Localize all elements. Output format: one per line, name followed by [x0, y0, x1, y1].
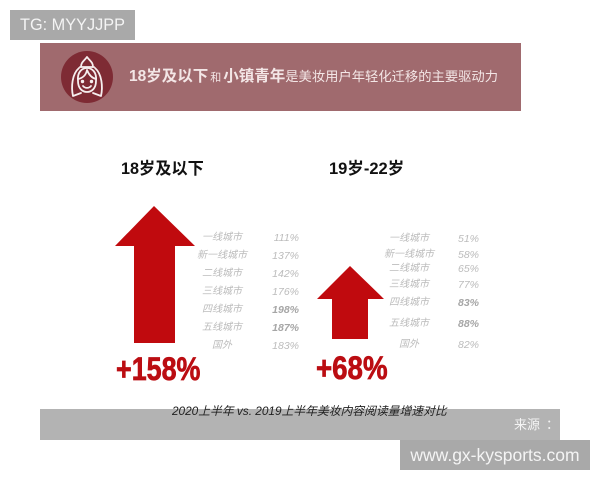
source label: 来源 ： [514, 417, 559, 432]
right city growth table: 83% [458, 297, 479, 309]
left city growth table: 四线城市 [202, 304, 242, 315]
right city growth table: 五线城市 [389, 318, 429, 329]
right city growth table: 77% [458, 279, 479, 291]
right city growth table: 四线城市 [389, 297, 429, 308]
watermark: website: www.gx-kysports.com [410, 445, 580, 465]
right total growth: +68% [316, 350, 388, 386]
right city growth table: 三线城市 [389, 279, 429, 290]
left city growth table: 一线城市 [202, 232, 242, 243]
right city growth table: 新一线城市 [384, 249, 434, 260]
watermark: website [400, 440, 590, 470]
watermark: telegram: TG: MYYJJPP [20, 16, 125, 34]
left city growth table: 137% [272, 250, 299, 262]
left city growth table: 187% [272, 322, 299, 334]
left city growth table: 111% [274, 232, 299, 244]
right city growth table: 国外 [399, 339, 419, 350]
right city growth table: 65% [458, 263, 479, 275]
right city growth table: 82% [458, 339, 479, 351]
banner panel [40, 43, 521, 111]
left heading: 18岁及以下 [121, 160, 204, 178]
chart caption: 2020上半年 vs. 2019上半年美妆内容阅读量增速对比 [172, 404, 447, 418]
left city growth table: 198% [272, 304, 299, 316]
left city growth table: 183% [272, 340, 299, 352]
right city growth table: 88% [458, 318, 479, 330]
right city growth table: 二线城市 [389, 263, 429, 274]
left city growth table: 五线城市 [202, 322, 242, 333]
icon: princess face [61, 51, 113, 103]
left city growth table: 二线城市 [202, 268, 242, 279]
footer band [40, 409, 560, 440]
banner heading: 18岁及以下和小镇青年是美妆用户年轻化迁移的主要驱动力 [129, 68, 498, 85]
left total growth: +158% [116, 351, 200, 387]
left city growth table: 三线城市 [202, 286, 242, 297]
right heading: 19岁-22岁 [329, 160, 404, 178]
right city growth table: 一线城市 [389, 233, 429, 244]
watermark: telegram [10, 10, 135, 40]
right city growth table: 58% [458, 249, 479, 261]
right city growth table: 51% [458, 233, 479, 245]
left city growth table: 新一线城市 [197, 250, 247, 261]
left city growth table: 176% [272, 286, 299, 298]
left city growth table: 国外 [212, 340, 232, 351]
left city growth table: 142% [272, 268, 299, 280]
